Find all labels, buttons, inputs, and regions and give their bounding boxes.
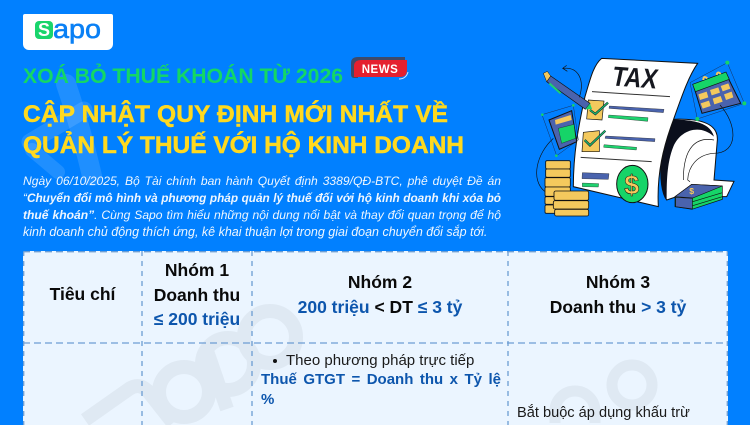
header: group 1 <box>154 260 240 329</box>
coin and bars: $ <box>624 170 639 200</box>
pen <box>543 71 592 109</box>
header: group 2 <box>298 272 462 316</box>
header: group 3: Doanh thu > 3 tỷ <box>550 296 686 316</box>
intro paragraph: kinh doanh chủ động thích ứng, kê khai thuận lợi trong giai đoạn chuyển đổi sắp tới. <box>23 225 487 239</box>
coin and bars <box>582 165 648 203</box>
intro paragraph: “Chuyển đổi mô hình và phương pháp quản lý thuế đối với hộ kinh doanh khi xóa bỏ <box>23 191 501 205</box>
intro paragraph: Ngày 06/10/2025, Bộ Tài chính ban hành Quyết định 3389/QĐ-BTC, phê duyệt Đề án <box>23 174 501 188</box>
news badge <box>351 57 408 80</box>
main title: QUẢN LÝ THUẾ VỚI HỘ KINH DOANH <box>23 130 464 159</box>
header: group 2: 200 triệu < DT ≤ 3 tỷ <box>298 296 462 316</box>
receipt curl <box>661 119 734 200</box>
logo: wordmark: apo <box>53 14 101 44</box>
coins stack <box>545 161 589 216</box>
intro paragraph: thuế khoán”. Cùng Sapo tìm hiểu những nội dung nổi bật và thay đổi quan trọng để hộ <box>23 208 501 222</box>
illustration: tax document <box>536 58 746 216</box>
header: group 3 <box>550 272 686 316</box>
logo: S mark <box>35 21 53 39</box>
calculator <box>541 104 578 157</box>
cash stack <box>675 184 722 209</box>
group 2 formula <box>261 371 501 408</box>
table grid lines <box>23 251 728 425</box>
table watermark <box>81 304 658 425</box>
header: group 1: Doanh thu <box>154 284 240 304</box>
comparison table <box>23 251 728 425</box>
connector curves <box>537 105 733 192</box>
header: group 1: Nhóm 1 <box>165 260 229 280</box>
group 2 formula: Thuế GTGT = Doanh thu x Tỷ lệ <box>261 371 501 388</box>
main title <box>23 100 464 159</box>
news badge: NEWS <box>362 64 398 76</box>
header: criteria: Tiêu chí <box>50 284 115 304</box>
paper <box>573 58 698 207</box>
cash stack: $ <box>689 186 694 196</box>
intro paragraph <box>23 174 501 239</box>
logo card <box>23 14 113 50</box>
main title: CẬP NHẬT QUY ĐỊNH MỚI NHẤT VỀ <box>23 100 448 128</box>
group 2 method <box>261 352 501 408</box>
calendar <box>690 61 746 121</box>
group 2 formula: % <box>261 391 274 408</box>
header: group 2: Nhóm 2 <box>348 272 412 292</box>
TAX heading: TAX <box>609 60 661 95</box>
dashed arrow from pen <box>563 65 581 97</box>
header: group 3: Nhóm 3 <box>586 272 650 292</box>
checklist <box>582 100 664 152</box>
watermark: header <box>22 74 102 186</box>
logo: S mark: S <box>38 20 50 40</box>
header: group 1: ≤ 200 triệu <box>154 309 240 329</box>
subtitle: XOÁ BỎ THUẾ KHOÁN TỪ 2026 <box>23 64 343 88</box>
group 3 text: Bắt buộc áp dụng khấu trừ <box>517 405 690 421</box>
group 2 method: Theo phương pháp trực tiếp <box>286 352 474 369</box>
